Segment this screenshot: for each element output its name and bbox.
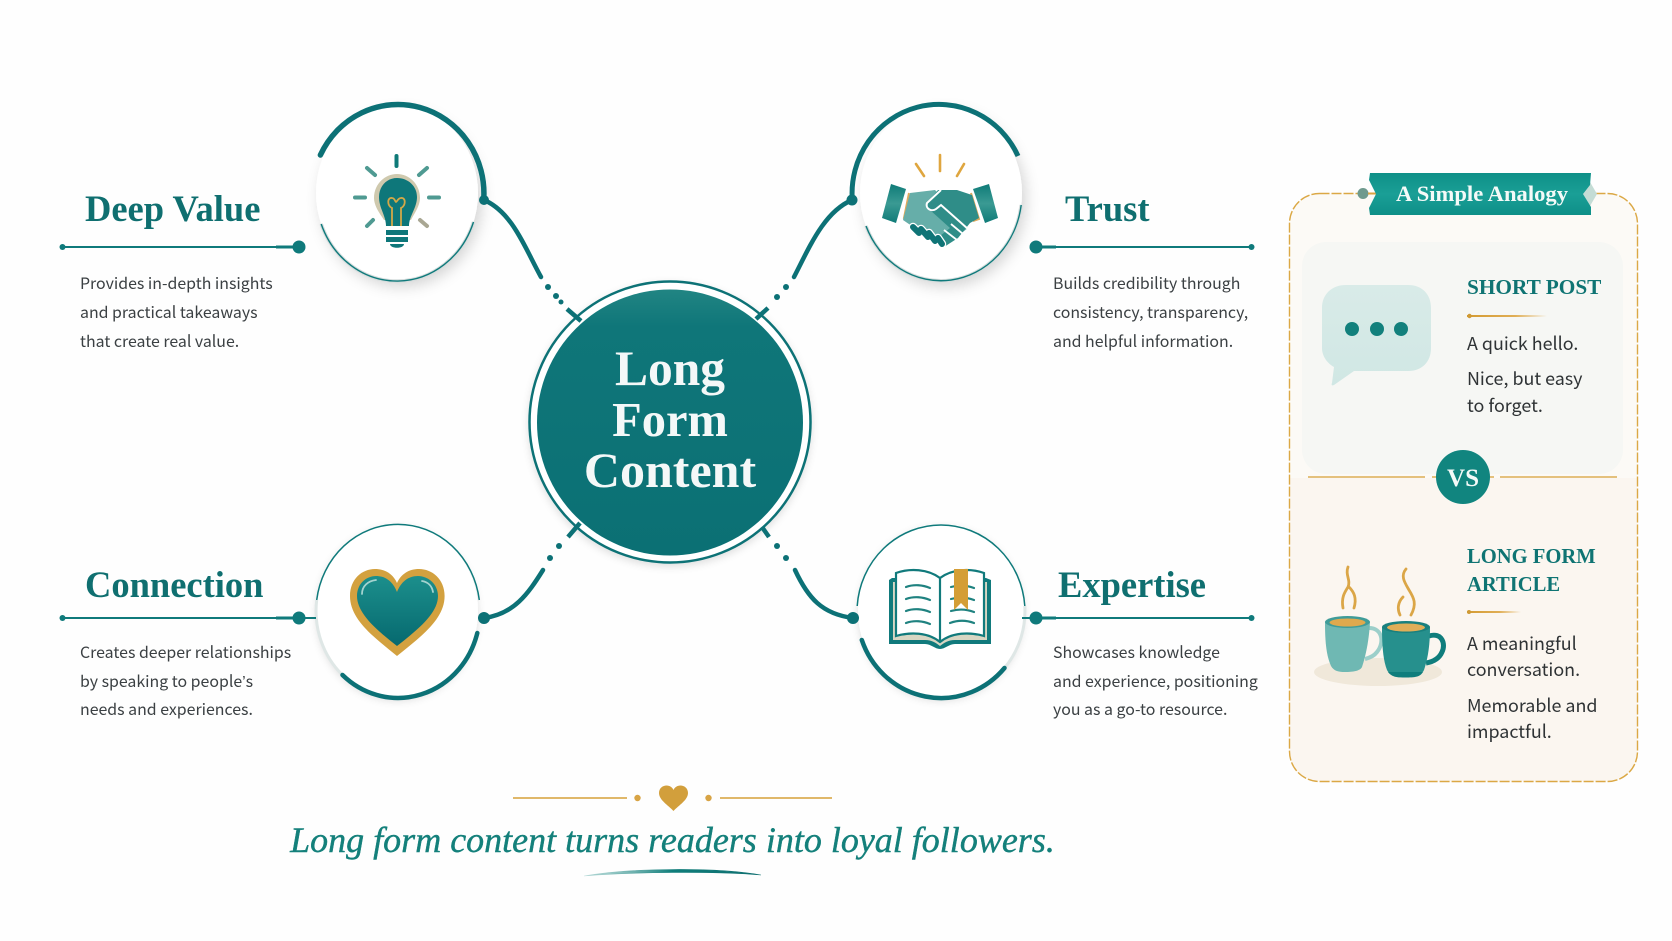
short post text: SHORT POST [1467,275,1601,299]
body text: Builds credibility through [1053,271,1240,294]
section: trust [1030,188,1254,352]
body text: and practical takeaways [80,300,258,323]
body text: needs and experiences. [80,697,253,720]
icon: heart [350,569,445,656]
vs divider [1308,450,1617,504]
heading: deep value: Deep Value [85,188,260,229]
section: deep value [60,188,306,352]
body text: and experience, positioning [1053,669,1258,692]
connector: trust to core [756,200,852,319]
icon: handshake [882,155,998,247]
body text: Creates deeper relationships [80,640,291,663]
body text: Showcases knowledge [1053,640,1220,663]
long form article text: conversation. [1467,656,1580,682]
long form article text: Memorable and [1467,692,1598,718]
node: deep value [316,105,489,281]
body text [80,271,273,352]
connector: connection to core [484,523,580,618]
heading: expertise: Expertise [1058,564,1206,605]
footer ornament [513,786,832,811]
section: connection [60,564,316,720]
long form article text: A meaningful [1467,630,1577,656]
icon: lightbulb [355,156,439,248]
body text: Provides in-depth insights [80,271,273,294]
long form article text: impactful. [1467,718,1552,744]
closing tagline: Long form content turns readers into loyal followers. [289,820,1055,860]
central title: Content [584,442,756,498]
body text [1053,640,1258,720]
leader line [60,240,306,254]
short post text: A quick hello. [1467,330,1578,356]
ribbon: a simple analogy: A Simple Analogy [1396,181,1569,206]
central title: Long [615,341,725,396]
icon: open book [889,569,991,649]
node: expertise [847,524,1025,698]
leader line [60,612,316,624]
section: expertise [1022,564,1258,720]
heading: trust: Trust [1065,188,1150,229]
body text [80,640,291,720]
short post text: Nice, but easy [1467,365,1583,391]
vs divider: VS [1447,465,1479,492]
short post text: to forget. [1467,392,1543,418]
leader line [1022,612,1254,624]
body text: consistency, transparency, [1053,300,1248,323]
central title [584,341,756,498]
body text: by speaking to people’s [80,669,253,692]
short post text [1467,275,1601,418]
icon: two coffee cups [1314,567,1443,686]
node: connection [316,524,490,698]
leader line [1030,240,1254,254]
connector: deep value to core [484,200,581,321]
connector: expertise to core [762,527,853,618]
body text [1053,271,1248,352]
central circle: long form content [530,282,810,562]
card: short post background [1302,242,1623,474]
tagline swoosh [584,869,761,876]
central title: Form [612,394,728,447]
icon: chat bubble [1322,285,1431,385]
panel: a simple analogy [1290,173,1638,782]
long form article text: LONG FORM [1467,546,1596,568]
body text: you as a go-to resource. [1053,697,1227,720]
node: trust [846,104,1022,281]
long form article text: ARTICLE [1467,574,1560,596]
body text: and helpful information. [1053,329,1233,352]
ribbon: a simple analogy [1358,173,1597,215]
long form article text [1467,546,1598,744]
heading: connection: Connection [85,564,263,605]
body text: that create real value. [80,329,239,352]
